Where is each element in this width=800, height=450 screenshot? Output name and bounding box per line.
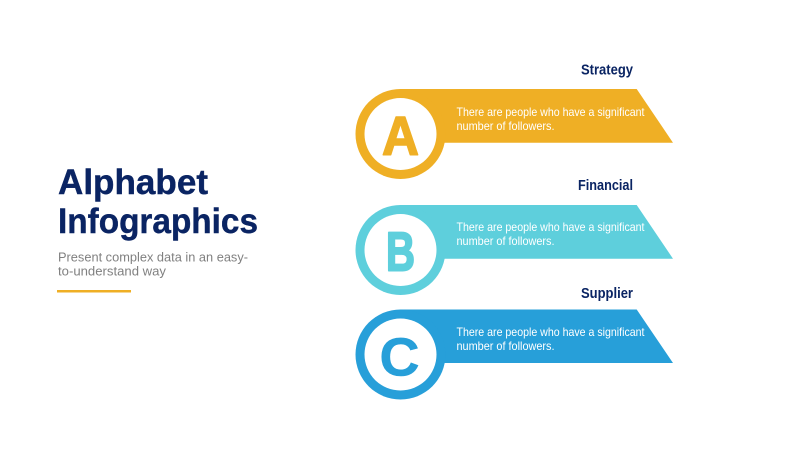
- subtitle: [58, 250, 248, 278]
- description C: [456, 325, 645, 353]
- heading: Strategy: Strategy: [581, 62, 634, 78]
- title: Infographics: [58, 202, 258, 241]
- ribbon C: [400, 310, 673, 363]
- item B: Financial: [356, 177, 673, 295]
- ribbon A: [400, 89, 673, 143]
- description A: number of followers.: [456, 119, 554, 133]
- title: [58, 163, 258, 241]
- heading: Supplier: Supplier: [581, 285, 633, 302]
- description A: [456, 105, 645, 133]
- subtitle: to-understand way: [58, 264, 167, 278]
- badge A: [356, 89, 446, 179]
- description B: There are people who have a significant: [456, 220, 645, 234]
- badge C: [356, 310, 446, 400]
- item A: Strategy: [356, 62, 673, 179]
- description C: number of followers.: [456, 339, 554, 353]
- description A: There are people who have a significant: [456, 105, 645, 119]
- badge C: C: [380, 328, 420, 388]
- accent underline: [57, 290, 131, 292]
- badge B: [356, 205, 446, 295]
- ribbon B: [400, 205, 673, 259]
- description B: [456, 220, 645, 248]
- badge A: A: [382, 104, 419, 166]
- title: Alphabet: [58, 163, 208, 202]
- description B: number of followers.: [456, 234, 554, 248]
- item C: Supplier: [356, 285, 673, 400]
- heading: Financial: Financial: [578, 177, 633, 194]
- badge B: B: [386, 220, 415, 282]
- subtitle: Present complex data in an easy-: [58, 250, 248, 264]
- description C: There are people who have a significant: [456, 325, 645, 339]
